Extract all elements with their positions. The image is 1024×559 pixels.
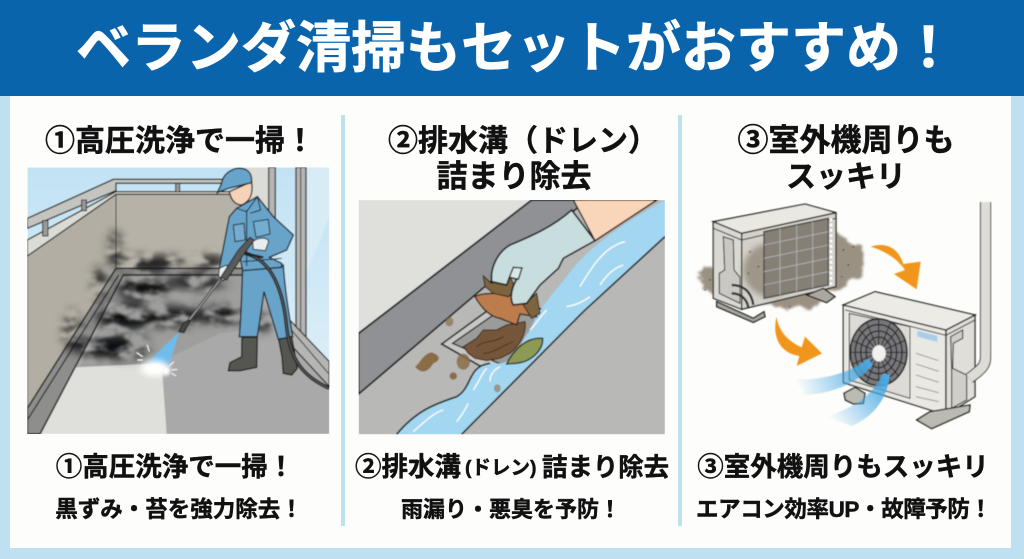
caption 1: ①高圧洗浄で一掃！ [56,452,294,482]
wall pipe [969,202,986,378]
illustration: dirty and clean outdoor AC units [700,202,986,429]
dust cloud [700,217,862,308]
caption 2 [355,452,669,482]
heading 3: ③室外機周りも [738,123,954,158]
green leaf [507,338,543,364]
clean unit [843,305,946,415]
fan grille [850,319,907,386]
water stream [397,200,665,434]
glove [491,210,595,305]
heading 2 second line: 詰まり除去 [436,159,592,194]
boots [228,337,257,371]
head [229,182,252,205]
caption 2: ②排水溝 [355,452,461,482]
arm [573,200,657,241]
header band [0,0,1024,96]
caption 2: 詰まり除去 [542,454,669,482]
illustration: gloved hand clearing leaves from drain [359,200,665,434]
worker trousers [239,265,293,339]
clean unit feet [844,387,865,404]
content panel [10,96,1011,548]
orange arrow lower left [775,317,822,366]
black mold stains [65,232,273,359]
orange arrow upper right [871,245,921,289]
subcaption 3: エアコン効率UP・故障予防！ [696,497,992,522]
caption 3: ③室外機周りもスッキリ [697,452,989,482]
panel: drain cleaning [355,125,669,522]
heading 3 second line: スッキリ [786,161,906,194]
wind streams [795,358,873,395]
worker jacket [219,197,293,273]
floor [76,275,330,434]
panel: high pressure washing [27,125,329,522]
illustration: worker pressure washing a balcony [27,167,329,434]
heading 2: ②排水溝（ドレン） [388,125,658,158]
hose [245,253,329,388]
subcaption 2: 雨漏り・悪臭を予防！ [401,497,621,522]
dirt [415,317,501,392]
panel: outdoor unit [696,123,992,522]
water jet [148,332,179,367]
title: ベランダ清掃もセットがおすすめ！ [76,17,956,79]
caption 2: (ドレン) [465,457,536,479]
heading 1: ①高圧洗浄で一掃！ [45,125,315,158]
dirty unit [713,222,742,309]
gloves and pressure gun [253,238,269,251]
subcaption 1: 黒ずみ・苔を強力除去！ [55,497,303,522]
brown leaf [475,292,537,325]
drain grate [440,307,542,367]
